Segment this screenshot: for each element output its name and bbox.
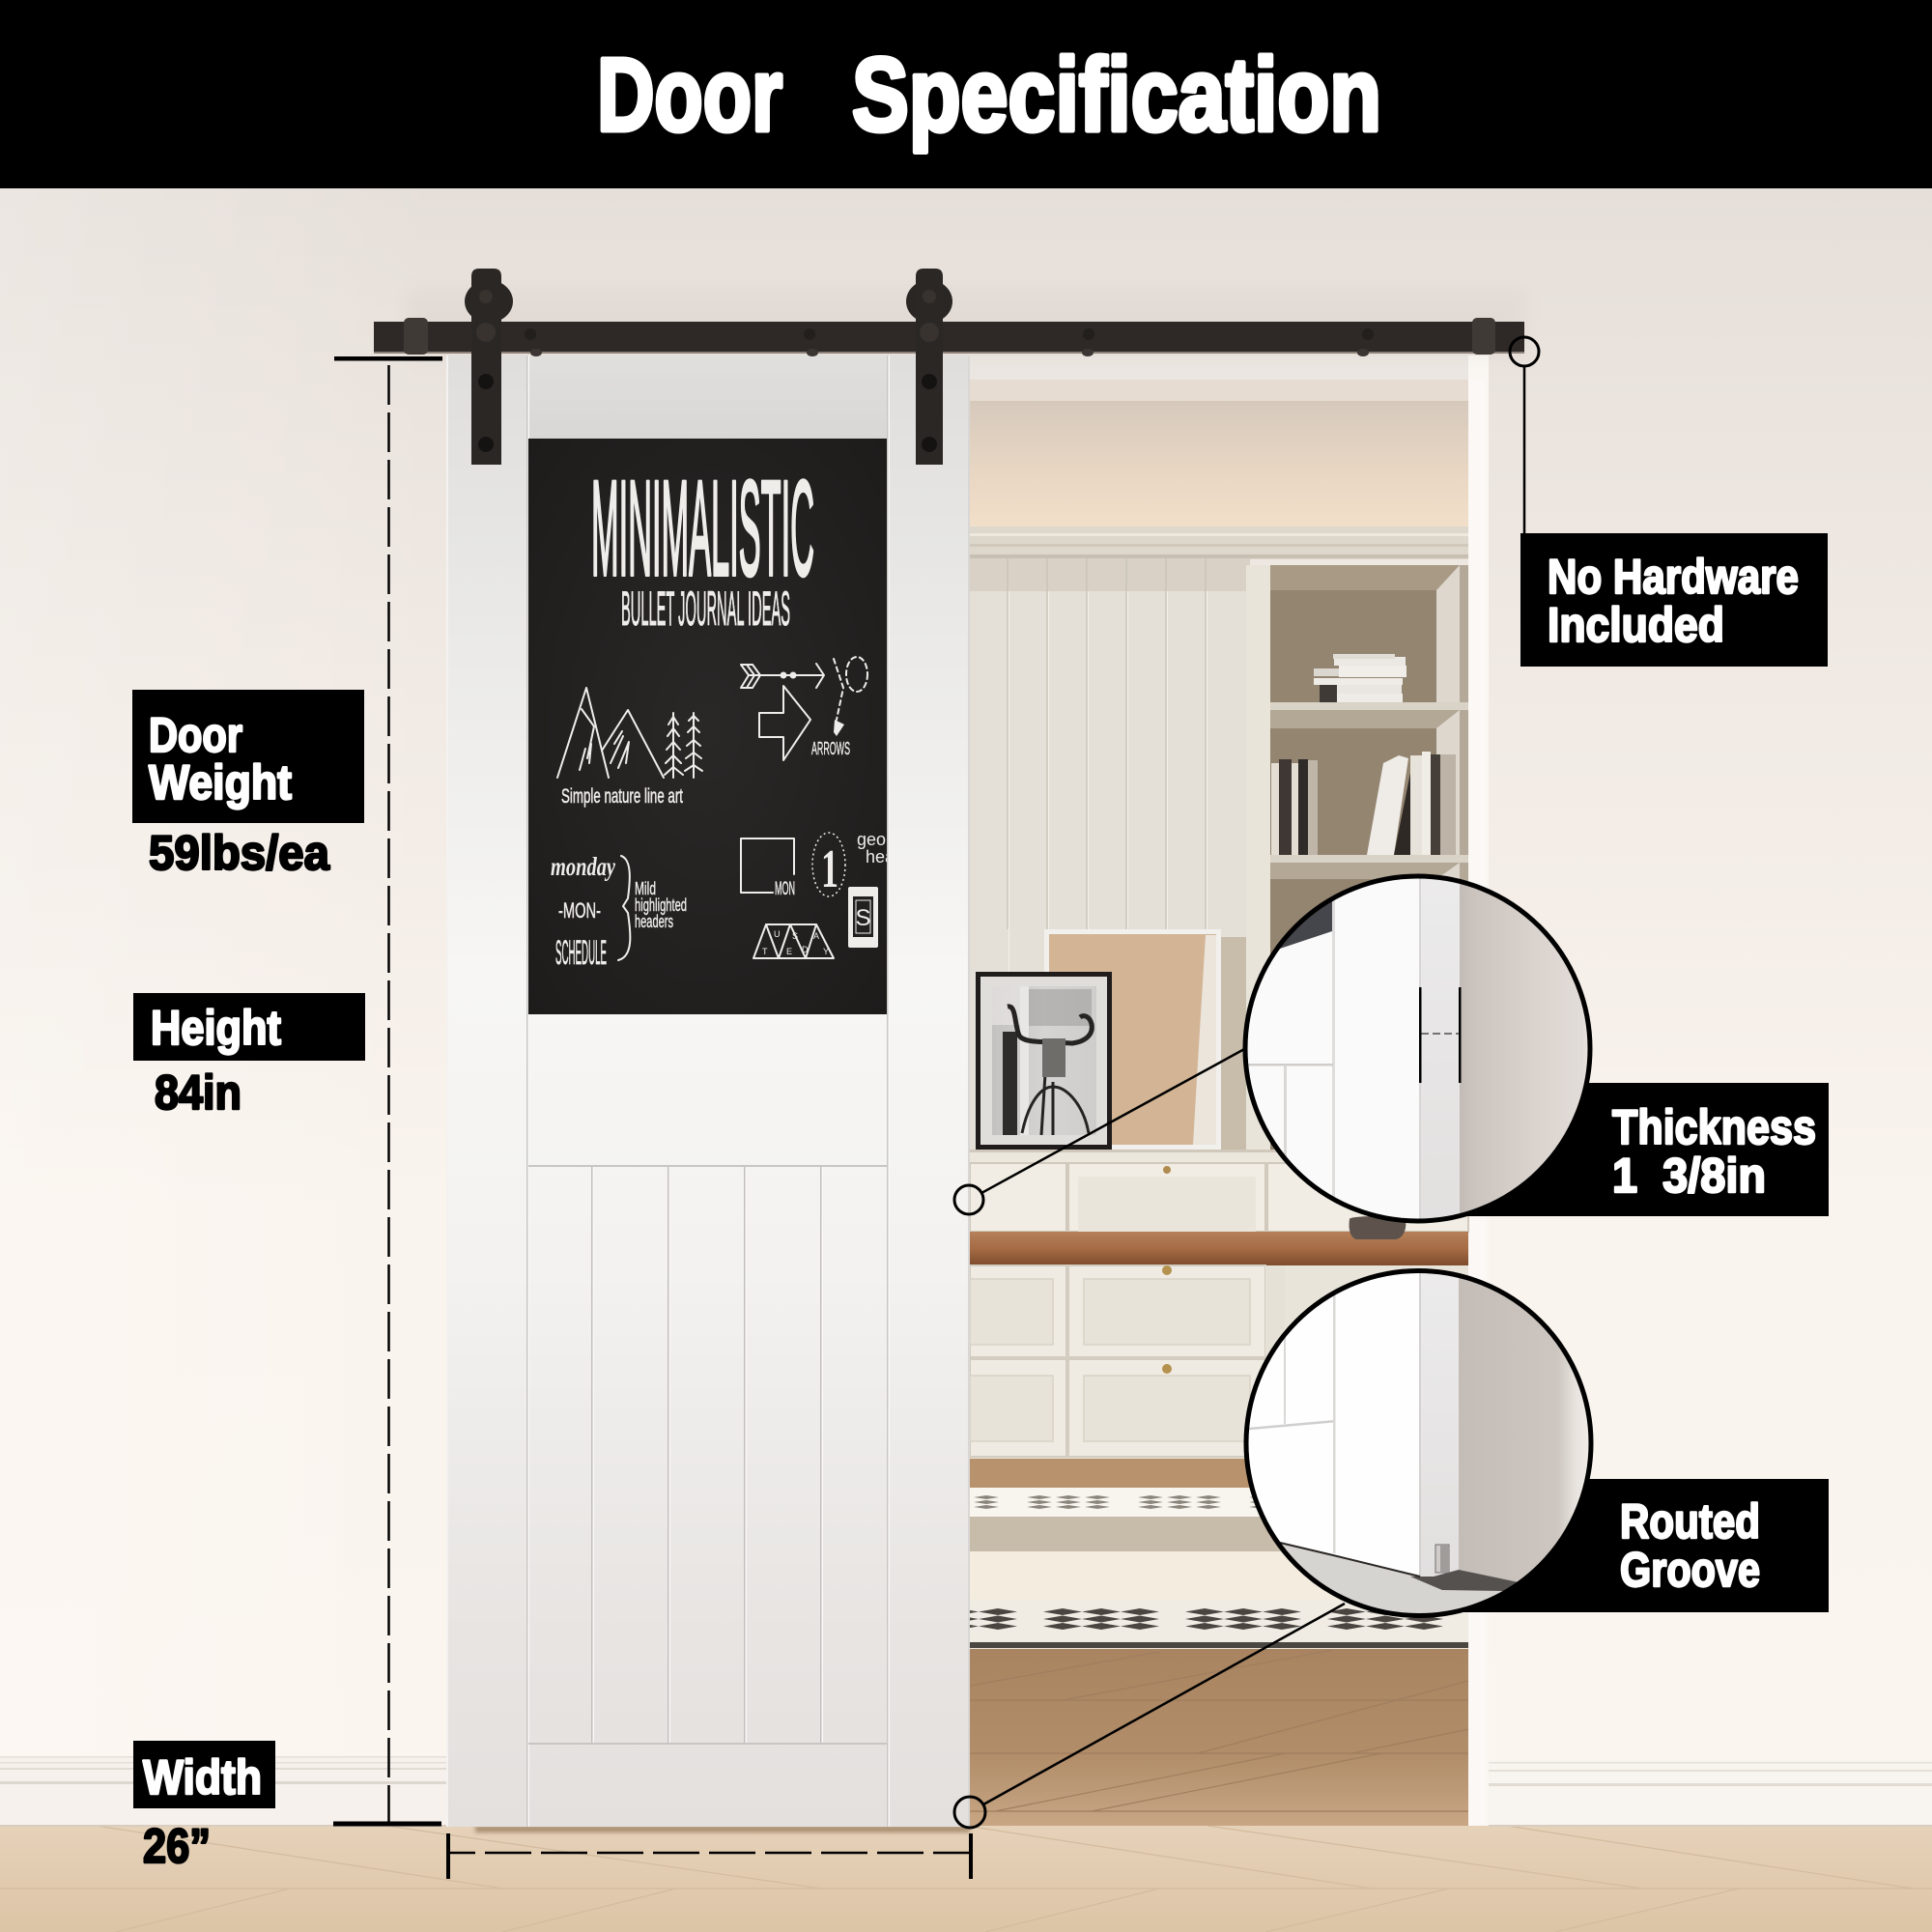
chalk tuesday banner: A xyxy=(813,931,819,941)
callout: routed groove xyxy=(1449,1479,1829,1612)
chalkboard panel: MON xyxy=(775,879,795,899)
height dimension line xyxy=(333,356,442,1826)
detail circle: routed groove xyxy=(1246,1269,1596,1623)
callout: width xyxy=(133,1741,275,1873)
panelled wall xyxy=(970,558,1250,1157)
chalk tuesday banner: S xyxy=(792,931,798,941)
callout: height: Height xyxy=(151,1001,281,1055)
interior wood floor xyxy=(970,1459,1468,1826)
text: MINIMALISTIC xyxy=(591,452,814,604)
leader line thickness xyxy=(954,1048,1246,1214)
chalk arrow feather xyxy=(741,664,824,688)
door frame trim xyxy=(966,355,1489,1826)
floor xyxy=(0,1826,1932,1932)
chalk highlighted headers note xyxy=(636,881,686,927)
chalk schedule block: -MON- xyxy=(558,898,601,923)
callout: no hardware included: Included xyxy=(1548,598,1724,652)
stacked books xyxy=(1314,654,1406,702)
chalk geometric note xyxy=(858,836,887,863)
callout: door weight: Door xyxy=(149,708,242,762)
door xyxy=(446,355,970,1827)
chalk tuesday banner: E xyxy=(786,947,792,956)
crown moulding xyxy=(970,526,1468,559)
chalk tuesday banner: T xyxy=(762,947,768,956)
door shadow on floor xyxy=(475,1826,970,1833)
callout: door weight: Weight xyxy=(149,755,292,810)
chalkboard panel: SCHEDULE xyxy=(555,934,607,972)
chalkboard panel: ARROWS xyxy=(811,739,850,758)
upper cabinet drawers xyxy=(970,1150,1468,1232)
routed groove notch xyxy=(1435,1545,1449,1573)
chalk tuesday banner: Y xyxy=(823,947,829,956)
chalk dotted number: 1 xyxy=(821,839,838,899)
chalk schedule block xyxy=(551,852,630,972)
patterned rug xyxy=(970,1488,1468,1649)
chalkboard panel xyxy=(528,439,904,1014)
chalk tuesday banner: U xyxy=(774,929,781,939)
chalk mountains xyxy=(557,688,664,778)
wheel right xyxy=(906,280,952,323)
rail and hanger wall shadow xyxy=(406,290,1526,357)
rail xyxy=(374,322,1524,354)
door bottom line xyxy=(1280,1543,1420,1577)
title banner: Door xyxy=(597,36,782,153)
stopper right xyxy=(1472,318,1495,355)
stopper left xyxy=(404,318,428,355)
chalk box header xyxy=(741,838,795,899)
chalk trees xyxy=(665,713,702,778)
callout: height xyxy=(133,993,365,1120)
callout: thickness xyxy=(1449,1083,1829,1216)
chalk highlighted headers note: Mild xyxy=(635,879,656,898)
chalk S badge: S xyxy=(855,905,871,931)
callout: width: 26” xyxy=(143,1819,211,1873)
callout: routed groove: Routed xyxy=(1620,1494,1760,1548)
callout: door weight: 59lbs/ea xyxy=(149,826,330,880)
chalk tuesday banner xyxy=(753,924,834,958)
callout: thickness: 1 3/8in xyxy=(1612,1149,1766,1203)
chalk dotted number xyxy=(812,833,845,899)
chalk geometric note: geom xyxy=(857,830,900,849)
strap left xyxy=(471,269,501,465)
title banner: Specification xyxy=(852,36,1381,153)
framed bicycle photo xyxy=(976,972,1112,1150)
callout: thickness: Thickness xyxy=(1612,1100,1816,1154)
callout: door weight xyxy=(132,690,364,880)
chalk caption nature: Simple nature line art xyxy=(561,785,683,808)
thickness measure mark xyxy=(1419,987,1461,1083)
lower cabinet xyxy=(970,1265,1468,1459)
barn door track hardware xyxy=(374,269,1524,465)
stile grooves xyxy=(526,355,890,1827)
dark bowl xyxy=(1350,1216,1406,1239)
width dimension line xyxy=(446,1833,973,1879)
floor below door xyxy=(1282,1544,1503,1613)
leader line routed groove xyxy=(954,1604,1345,1828)
lower planks xyxy=(528,1165,887,1745)
top rail xyxy=(528,355,887,439)
text: BULLET JOURNAL IDEAS xyxy=(621,582,790,636)
callout: no hardware included: No Hardware xyxy=(1548,550,1799,604)
baseboard right xyxy=(1489,1760,1932,1827)
wood countertop xyxy=(970,1232,1468,1265)
leaning art print xyxy=(1044,929,1246,1150)
detail circle: door thickness xyxy=(1244,874,1595,1230)
shelving unit xyxy=(1246,565,1468,1154)
ceiling xyxy=(970,401,1468,526)
chalk schedule block: monday xyxy=(551,852,616,881)
callout: height: 84in xyxy=(155,1065,242,1120)
chalk tuesday banner: D xyxy=(802,945,809,954)
chalk geometric note: head xyxy=(866,847,904,867)
interior room scene xyxy=(970,401,1468,1826)
chalk block arrow xyxy=(759,686,810,760)
chalk highlighted headers note: highlighted xyxy=(635,895,687,915)
rail bolts xyxy=(525,328,1374,356)
chalk S badge xyxy=(848,887,878,948)
callout: routed groove: Groove xyxy=(1620,1543,1760,1597)
floor shadow xyxy=(1410,1570,1519,1591)
upright books xyxy=(1271,752,1456,855)
callout: width: Width xyxy=(143,1750,262,1804)
strap right xyxy=(916,269,943,465)
baseboard left xyxy=(0,1756,448,1827)
chalk highlighted headers note: headers xyxy=(635,912,673,931)
wheel left xyxy=(465,280,513,323)
title banner xyxy=(0,0,1932,188)
chalk dashed loop arrow xyxy=(834,657,867,736)
callout: no hardware included xyxy=(1510,337,1828,667)
